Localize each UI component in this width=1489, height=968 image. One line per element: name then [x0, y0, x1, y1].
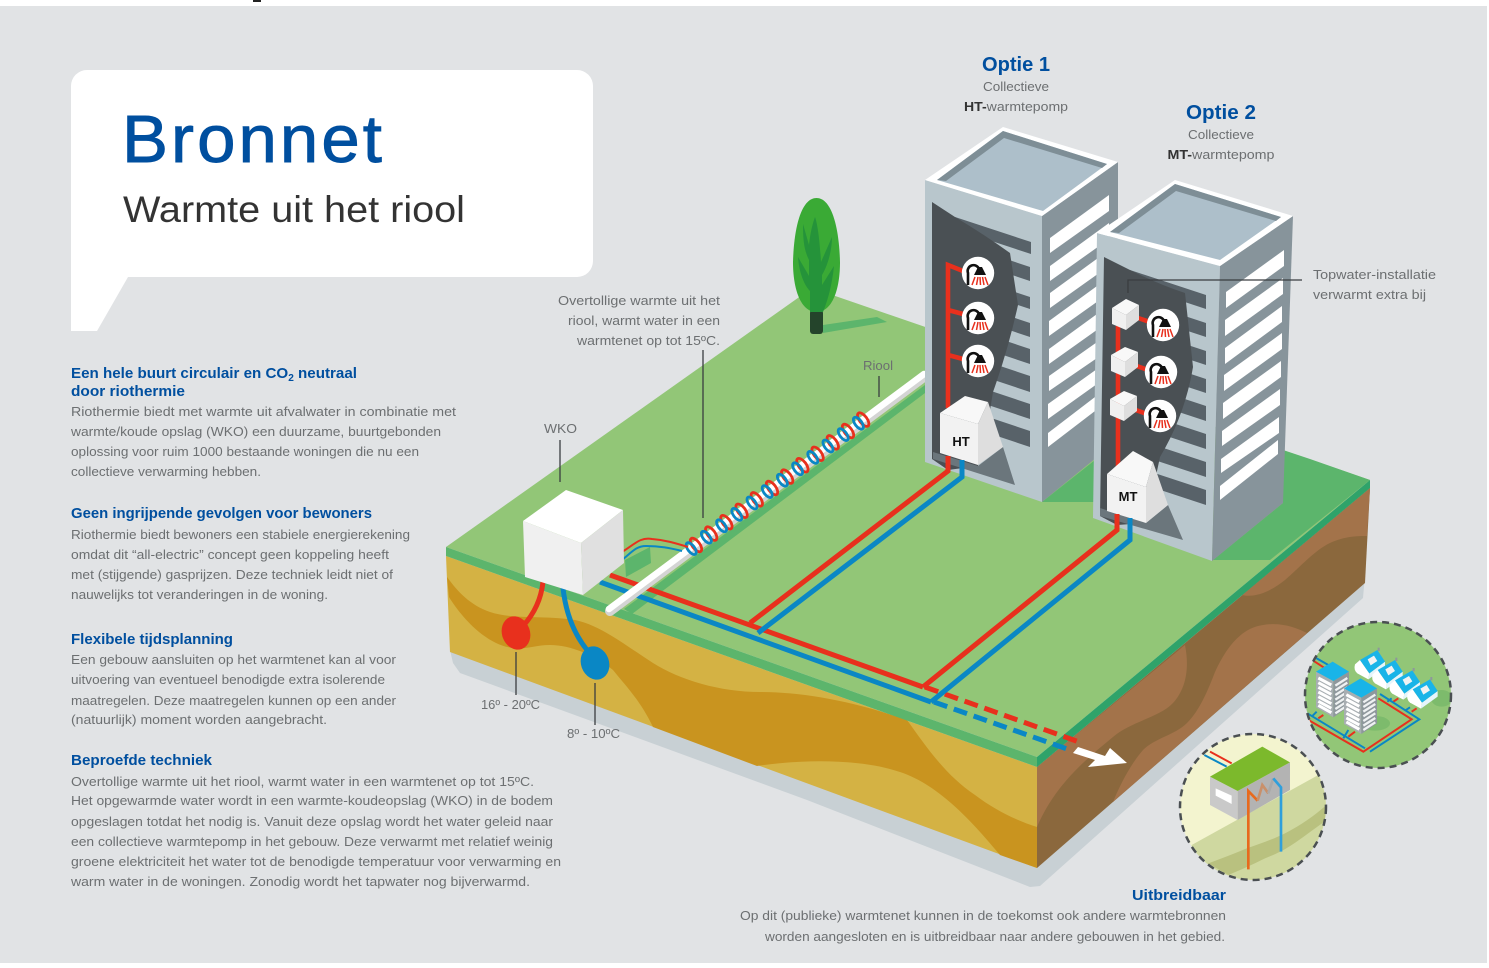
HT heat pump	[940, 396, 1003, 465]
red feed pipes	[750, 456, 1117, 687]
dark green shadow patches	[624, 385, 1370, 614]
WKO storage with wells	[497, 490, 688, 684]
building feed pipes	[750, 456, 1130, 702]
text block: bewoners: nauwelijks tot veranderingen in de woning.	[71, 587, 328, 602]
soil right face	[1037, 488, 1370, 868]
callout: cold well temperature	[567, 683, 620, 741]
text block: techniek	[70, 752, 561, 889]
callout: riool	[863, 358, 893, 397]
text block: tijdsplanning: uitvoering van eventueel benodigde extra isolerende	[71, 672, 385, 687]
icon: showers	[1144, 309, 1179, 432]
label: optie 1: HT-warmtepomp	[964, 99, 1068, 114]
callout: overtollige warmte: Overtollige warmte uit het	[558, 293, 720, 308]
blue feed pipes	[758, 460, 1130, 702]
label: optie 1	[964, 54, 1068, 114]
text block: tijdsplanning: maatregelen. Deze maatregelen kunnen op een ander	[71, 693, 397, 708]
label: optie 2: MT-warmtepomp	[1168, 147, 1274, 162]
green edge right	[1037, 480, 1370, 767]
text block: techniek: groene elektriciteit het water tot de benodigde temperatuur voor verwarming en	[71, 854, 561, 869]
callout: overtollige warmte: riool, warmt water in een	[568, 313, 720, 328]
text block: circulair: collectieve verwarming hebben.	[71, 464, 261, 479]
text block: uitbreidbaar: Uitbreidbaar	[1132, 887, 1226, 904]
label: optie 2: Optie 2	[1186, 102, 1256, 124]
interior cutaway	[932, 202, 1018, 470]
text block: circulair	[70, 365, 456, 479]
cold well	[563, 588, 587, 650]
text block: circulair: 2	[288, 373, 294, 384]
callout: topwater: verwarmt extra bij	[1313, 287, 1426, 302]
callout: topwater	[1128, 267, 1436, 302]
label: optie 2: Collectieve	[1188, 127, 1254, 142]
soil front face	[446, 556, 1037, 868]
text block: techniek: warm water in de woningen. Zonodig wordt het tapwater nog bijverwarmd.	[70, 874, 530, 889]
label: optie 2	[1168, 102, 1274, 162]
tree	[793, 198, 887, 334]
blue main pipe	[600, 582, 931, 702]
text block: circulair: oplossing voor ruim 1000 bestaande woningen die nu een	[71, 444, 419, 459]
green edge front	[446, 547, 1037, 767]
label: optie 1: Collectieve	[983, 79, 1049, 94]
callout: topwater: Topwater-installatie	[1313, 267, 1436, 282]
MT heat pump: MT	[1119, 489, 1137, 504]
connection to sewer	[622, 539, 688, 552]
arrow: expansion	[1073, 747, 1127, 767]
text block: bewoners: omdat dit “all-electric” concept geen koppeling heeft	[71, 547, 389, 562]
white window bands	[1220, 250, 1284, 500]
dashed extension blue	[934, 702, 1070, 750]
text block: bewoners: Riothermie biedt bewoners een stabiele energierekening	[71, 527, 410, 542]
HT heat pump: HT	[952, 434, 970, 449]
text block: techniek: opgeslagen totdat het nodig is. Vanuit deze opslag wordt het water geleid naar	[71, 814, 554, 829]
callout: warm well temperature: 16º - 20ºC	[481, 697, 540, 712]
sewer pipe with coil	[609, 374, 925, 611]
text block: circulair: warmte/koude opslag (WKO) een duurzame, buurtgebonden	[70, 424, 441, 439]
text block: circulair: Riothermie biedt met warmte uit afvalwater in combinatie met	[71, 404, 456, 419]
callout: overtollige warmte	[558, 293, 720, 518]
interior cutaway	[1100, 257, 1193, 525]
title: Bronnet	[122, 102, 385, 177]
subtitle: Warmte uit het riool	[123, 189, 465, 230]
text block: bewoners	[71, 505, 410, 602]
ground block illustration	[446, 288, 1370, 887]
callout: cold well temperature: 8º - 10ºC	[567, 726, 620, 741]
text block: uitbreidbaar	[740, 887, 1226, 944]
text block: uitbreidbaar: Op dit (publieke) warmtenet kunnen in de toekomst ook andere warmtebronnen	[740, 908, 1226, 923]
text block: tijdsplanning: (natuurlijk) moment worden aangebracht.	[71, 712, 327, 727]
building: optie 1	[925, 127, 1118, 502]
text block: tijdsplanning	[71, 631, 397, 727]
text block: circulair: Een hele buurt circulair en CO	[71, 365, 286, 382]
text block: techniek: Het opgewarmde water wordt in een warmte-koudeopslag (WKO) in de bodem	[71, 793, 553, 808]
dark slats	[955, 217, 1031, 447]
text block: techniek: Overtollige warmte uit het riool, warmt water in een warmtenet op tot 15ºC.	[71, 774, 534, 789]
block shadow	[450, 575, 1365, 887]
heat network main pipes	[600, 575, 1082, 750]
callout: WKO: WKO	[544, 421, 577, 436]
building: optie 2	[1093, 180, 1293, 561]
MT heat pump	[1107, 451, 1168, 523]
text block: circulair: door riothermie	[71, 383, 185, 400]
text block: techniek: Beproefde techniek	[71, 752, 213, 769]
circle: other heat source	[1180, 734, 1332, 887]
text block: tijdsplanning: Flexibele tijdsplanning	[71, 631, 233, 648]
callout: warm well temperature	[481, 652, 540, 712]
text block: tijdsplanning: Een gebouw aansluiten op het warmtenet kan al voor	[71, 652, 397, 667]
warm well	[523, 582, 543, 626]
text block: circulair: neutraal	[294, 365, 357, 382]
riser pipe	[1116, 326, 1120, 470]
callout: overtollige warmte: warmtenet op tot 15ºC.	[576, 333, 720, 348]
dark slats	[1130, 270, 1206, 505]
circle: neighbourhood	[1305, 622, 1452, 768]
text block: bewoners: Geen ingrijpende gevolgen voor bewoners	[71, 505, 372, 522]
white cube	[523, 490, 623, 543]
icon: showers	[962, 257, 994, 377]
text block: techniek: een collectieve warmtepomp in het gebouw. Deze verwarmt met relatief weinig	[71, 834, 553, 849]
callout: riool: Riool	[863, 358, 893, 373]
title card	[71, 70, 593, 331]
callout: WKO	[544, 421, 577, 482]
dashed extension red	[925, 687, 1082, 743]
text block: uitbreidbaar: worden aangesloten en is uitbreidbaar naar andere gebouwen in het gebied.	[764, 929, 1225, 944]
white window bands	[1048, 195, 1109, 447]
green surface	[446, 288, 1370, 757]
red main pipe	[610, 575, 923, 687]
text block: bewoners: met (stijgende) gasprijzen. Deze techniek leidt niet of	[71, 567, 393, 582]
topwater boxes	[1110, 299, 1139, 421]
label: optie 1: Optie 1	[982, 54, 1050, 76]
riser pipe	[948, 265, 963, 408]
